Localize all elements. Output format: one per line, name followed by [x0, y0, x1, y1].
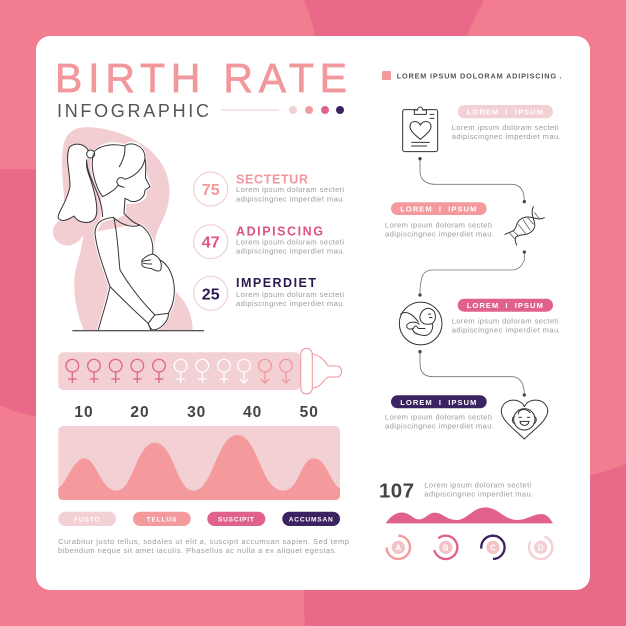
blob behind the figure [53, 127, 193, 331]
step 2 label: LOREM I IPSUM [400, 205, 477, 214]
step 4 label: Lorem ipsum doloram secteti [385, 412, 492, 421]
age scale [74, 404, 319, 421]
stat: 107 [379, 479, 533, 502]
age scale: 50 [300, 404, 319, 421]
figure outline [58, 143, 174, 331]
stat: 75 sectetur [194, 172, 345, 206]
icon: DNA helix [505, 207, 544, 245]
stat: 47 adipiscing: Lorem ipsum doloram secteti [236, 238, 344, 246]
stat: 25 imperdiet: IMPERDIET [236, 276, 316, 290]
step 4 label: adipiscingnec imperdiet mau. [385, 421, 494, 430]
title decoration: line and dots [221, 106, 344, 114]
icon: baby in heart [501, 400, 548, 439]
stat: 107: 107 [379, 479, 414, 502]
right heading: LOREM IPSUM DOLORAM ADIPISCING . [397, 71, 562, 80]
paragraph [58, 537, 349, 555]
icon: fetus in womb [399, 302, 442, 345]
arrow: clipboard to DNA [418, 157, 526, 203]
legend pills: FUSTO [74, 516, 100, 524]
stat: 25 imperdiet: 25 [202, 286, 220, 303]
stat: 75 sectetur: SECTETUR [236, 172, 308, 186]
age scale: 30 [187, 404, 206, 421]
ground line [72, 330, 204, 331]
wave chart [386, 507, 553, 523]
arrow: DNA to fetus [418, 250, 526, 297]
step 1 label: Lorem ipsum doloram secteti [452, 123, 559, 132]
step 3 label: LOREM I IPSUM [467, 301, 544, 310]
step 3 label [452, 299, 561, 334]
legend pills: ACCUMSAN [289, 516, 334, 524]
stat: 107: Lorem ipsum doloram secteti [424, 480, 532, 489]
paragraph: bibendum neque sit amet iaculis. Phasellus ac nulla a ex aliquet egestas. [58, 546, 337, 555]
stat: 47 adipiscing: ADIPISCING [236, 225, 323, 239]
age scale: 10 [74, 404, 94, 421]
ring C: C [490, 543, 496, 552]
legend pills [58, 512, 340, 526]
area chart [58, 426, 340, 500]
stat: 107: adipiscingnec imperdiet mau. [424, 490, 533, 499]
step 1 label [452, 105, 561, 141]
step 2 label: Lorem ipsum doloram secteti [385, 220, 492, 229]
stat: 75 sectetur: Lorem ipsum doloram secteti [236, 185, 344, 194]
pregnant woman illustration [53, 127, 204, 331]
step 1 label: adipiscingnec imperdiet mau. [452, 132, 561, 141]
arrow: fetus to baby [418, 350, 526, 397]
stat: 47 adipiscing: 47 [202, 235, 220, 252]
age scale: 40 [243, 404, 262, 421]
ring A: A [395, 543, 401, 552]
ring C [481, 536, 505, 559]
step 4 label: LOREM I IPSUM [400, 398, 477, 407]
age scale: 20 [130, 404, 150, 421]
ring B: B [443, 543, 449, 552]
stat: 75 sectetur: 75 [202, 182, 220, 199]
stat: 47 adipiscing: adipiscingnec imperdiet mau. [236, 246, 345, 256]
white card [36, 36, 590, 590]
paragraph: Curabitur justo tellus, sodales ut elit a, suscipit accumsan sapien. Sed temp [58, 537, 349, 546]
stat: 25 imperdiet [194, 276, 345, 310]
legend pills: TELLUS [147, 516, 177, 524]
ring D: D [538, 543, 544, 552]
title: BIRTH RATE [55, 55, 347, 101]
step 2 label: adipiscingnec imperdiet mau. [385, 229, 494, 238]
step 3 label: adipiscingnec imperdiet mau. [452, 325, 561, 334]
baby bottle with symbols [58, 348, 342, 394]
ring charts [387, 535, 556, 562]
stat: 47 adipiscing [194, 225, 345, 259]
stat: 25 imperdiet: Lorem ipsum doloram secteti [236, 290, 344, 299]
step 1 label: LOREM I IPSUM [467, 108, 544, 117]
step 3 label: Lorem ipsum doloram secteti [452, 316, 559, 325]
ring A [387, 536, 410, 559]
ring B [434, 536, 457, 559]
stat: 25 imperdiet: adipiscingnec imperdiet mau. [236, 299, 345, 308]
step 2 label [385, 202, 494, 238]
step 4 label [385, 395, 494, 430]
ring D [527, 535, 556, 562]
legend pills: SUSCIPIT [218, 516, 255, 524]
subtitle: INFOGRAPHIC [57, 101, 209, 121]
stat: 75 sectetur: adipiscingnec imperdiet mau. [236, 195, 345, 204]
icon: clipboard with heart [403, 107, 438, 152]
